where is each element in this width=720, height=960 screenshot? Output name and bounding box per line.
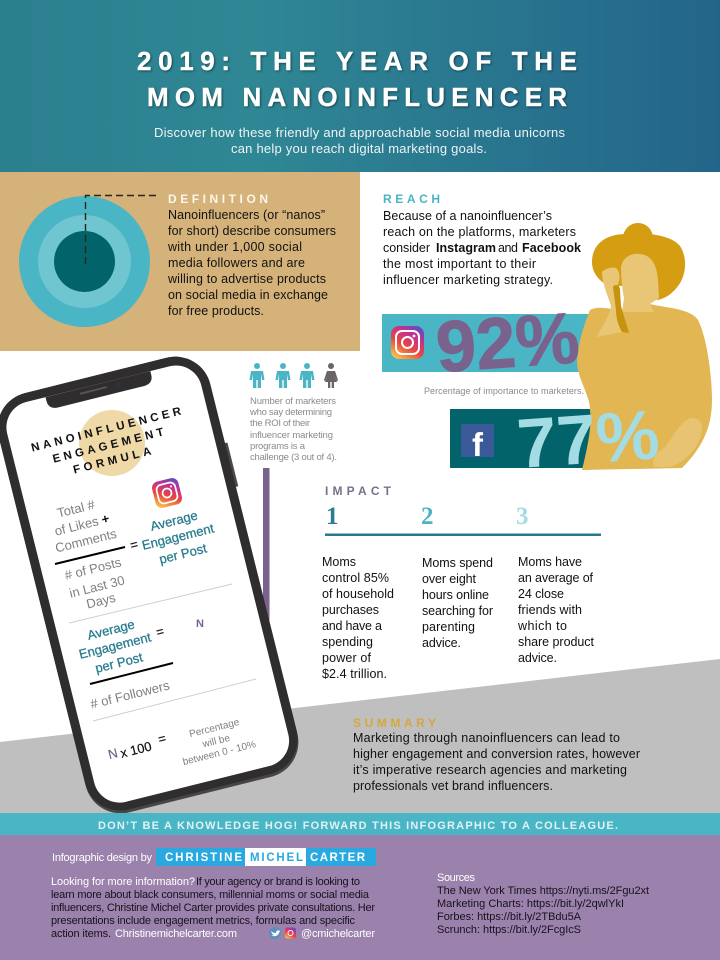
impact column 2: parenting — [422, 620, 475, 634]
title: 2019: THE YEAR OF THE — [137, 46, 577, 76]
stat: 92%: 92% — [434, 298, 582, 388]
illustration: woman in hat — [577, 223, 712, 470]
contact paragraph: If your agency or brand is looking to — [196, 876, 360, 888]
icon: facebook logo — [461, 424, 494, 463]
formula 1 denominator: in Last 30 — [68, 573, 126, 601]
formula 2 denominator: # of Followers — [89, 677, 171, 712]
designer name badge — [156, 848, 376, 866]
social handle: @cmichelcarter — [301, 928, 375, 940]
summary body: Marketing through nanoinfluencers can lead to — [353, 731, 620, 745]
contact paragraph: presentations include engagement metrics, formulas and specific — [51, 915, 356, 927]
pictogram caption: challenge (3 out of 4). — [250, 452, 337, 463]
reach text: reach on the platforms, marketers — [383, 225, 576, 239]
formula 1 denominator: # of Posts — [63, 554, 123, 583]
impact column 3: friends with — [518, 603, 582, 617]
formula 3 result: Percentage — [188, 717, 241, 740]
definition text: on social media in exchange — [168, 288, 328, 302]
formula 1 result: per Post — [158, 540, 209, 567]
formula 1 result: Average — [149, 508, 199, 534]
formula 3 result: will be — [201, 733, 232, 751]
definition text: Nanoinfluencers (or “nanos” — [168, 208, 325, 222]
icon: instagram logo — [391, 326, 424, 359]
icon: facebook logo: f — [472, 426, 484, 463]
formula title: NANOINFLUENCER — [30, 405, 183, 455]
definition text: for short) describe consumers — [168, 224, 336, 238]
impact column 3: share product — [518, 635, 595, 649]
call to action banner: DON’T BE A KNOWLEDGE HOG! FORWARD THIS INFOGRAPHIC TO A COLLEAGUE. — [98, 820, 618, 832]
number 1: 1 — [326, 503, 338, 530]
impact column 3: an average of — [518, 571, 594, 585]
reach text: consider — [383, 241, 430, 255]
designer name badge: CARTER — [310, 852, 366, 864]
formula 1 denominator — [63, 554, 126, 611]
equals sign: = — [154, 623, 165, 640]
contact paragraph — [51, 876, 375, 940]
people pictogram: 3 out of 4 — [250, 363, 338, 388]
pictogram caption: programs is a — [250, 441, 306, 452]
panel: summary background — [0, 659, 720, 813]
stat: 77%: 77% — [515, 395, 662, 483]
phone with engagement formula — [0, 348, 308, 821]
formula 1 numerator: Comments — [54, 526, 119, 556]
sources: Scrunch: https://bit.ly/2FcgIcS — [437, 924, 581, 936]
formula 2 numerator: Average — [86, 617, 136, 643]
footer panel — [0, 835, 720, 960]
summary body — [353, 731, 640, 793]
subtitle — [154, 125, 566, 156]
contact paragraph: action items. — [51, 928, 111, 940]
definition text: for free products. — [168, 304, 264, 318]
impact column 3: advice. — [518, 651, 557, 665]
title — [137, 46, 577, 112]
reach text — [383, 209, 581, 287]
design credit: Infographic design by — [52, 852, 152, 864]
panel: reach — [382, 192, 600, 468]
reach text: the most important to their — [383, 257, 536, 271]
definition text: with under 1,000 social — [167, 240, 302, 254]
title: MOM NANOINFLUENCER — [147, 82, 567, 112]
phone body — [0, 348, 308, 821]
definition text — [167, 208, 336, 318]
pictogram caption: the ROI of their — [250, 418, 310, 429]
formula title — [30, 405, 183, 477]
formula 2 numerator: Engagement — [77, 629, 153, 662]
stat caption: Percentage of importance to marketers. — [424, 386, 584, 396]
call to action banner — [0, 813, 720, 835]
number 2: 2 — [421, 503, 434, 530]
impact column 2 — [422, 556, 493, 650]
subtitle: Discover how these friendly and approachable social media unicorns — [154, 125, 566, 140]
header banner — [0, 0, 720, 172]
formula 3: N — [107, 745, 119, 762]
reach text: and — [498, 241, 518, 255]
panel: impact — [322, 484, 601, 681]
impact column 1: power of — [322, 651, 372, 665]
formula 3 result: between 0 - 10% — [182, 739, 257, 768]
vertical purple bar — [263, 468, 270, 620]
impact column 1 — [322, 555, 394, 681]
pictogram caption: Number of marketers — [250, 396, 336, 407]
impact column 3 — [517, 555, 595, 665]
reach text: Facebook — [522, 241, 581, 255]
formula title badge — [79, 410, 145, 476]
contact paragraph: learn more about black consumers, millennial moms or social media — [51, 889, 370, 901]
summary text block — [353, 716, 640, 793]
reach text: Because of a nanoinfluencer’s — [383, 209, 552, 223]
impact column 3: Moms have — [518, 555, 582, 569]
impact column 1: purchases — [322, 603, 379, 617]
designer name badge: CHRISTINE — [165, 852, 242, 864]
formula title: ENGAGEMENT — [52, 426, 165, 466]
subtitle: can help you reach digital marketing goals. — [231, 141, 487, 156]
contact paragraph: influencers, Christine Michel Carter provides private consultations. Her — [51, 902, 375, 914]
formula 1 denominator: Days — [85, 590, 118, 611]
number 3: 3 — [516, 503, 528, 530]
summary body: professionals vet brand influencers. — [353, 779, 553, 793]
impact column 3: which to — [517, 619, 567, 633]
impact column 1: spending — [322, 635, 373, 649]
pictogram caption — [249, 396, 337, 463]
impact heading: IMPACT — [325, 484, 392, 498]
pictogram caption: who say determining — [249, 407, 332, 418]
impact column 1: of household — [322, 587, 394, 601]
facebook stat bar — [450, 409, 600, 468]
formula 1 numerator — [53, 497, 119, 556]
impact column 1: control 85% — [322, 571, 389, 585]
sources — [437, 872, 649, 936]
icon: concentric circles — [19, 196, 160, 327]
instagram stat bar — [382, 314, 597, 372]
summary heading: SUMMARY — [353, 716, 436, 730]
contact paragraph: Looking for more information? — [51, 876, 195, 888]
formula 3 — [107, 730, 167, 762]
impact column 1: $2.4 trillion. — [322, 667, 387, 681]
definition text: willing to advertise products — [167, 272, 326, 286]
summary body: it’s imperative research agencies and marketing — [353, 763, 627, 777]
formula 1 numerator: Total # — [56, 497, 97, 521]
formula title: FORMULA — [72, 446, 153, 477]
summary body: higher engagement and conversion rates, however — [353, 747, 640, 761]
impact column 1: and have a — [322, 619, 382, 633]
formula 3 result — [182, 717, 257, 768]
definition heading: DEFINITION — [168, 192, 268, 206]
designer name badge: MICHEL — [250, 852, 303, 864]
impact column 2: searching for — [422, 604, 493, 618]
definition text: media followers and are — [168, 256, 305, 270]
formula 3: x 100 — [119, 739, 153, 761]
impact column 3: 24 close — [518, 587, 564, 601]
icon: instagram logo small — [151, 477, 183, 509]
pictogram caption: influencer marketing — [250, 430, 333, 441]
reach text: influencer marketing strategy. — [383, 273, 553, 287]
icon: twitter — [269, 927, 281, 939]
formula 2 numerator — [77, 617, 153, 676]
reach heading: REACH — [383, 192, 440, 206]
formula 1 numerator: of Likes + — [53, 510, 111, 539]
formula 2 numerator: per Post — [94, 649, 145, 676]
impact column 2: over eight — [422, 572, 477, 586]
impact column 2: advice. — [422, 636, 461, 650]
sources: Sources — [437, 872, 476, 884]
formula 1 result: Engagement — [140, 520, 216, 553]
panel: definition — [0, 172, 360, 351]
sources: Marketing Charts: https://bit.ly/2qwlYkI — [437, 898, 624, 910]
variable N: N — [196, 618, 204, 630]
sources: Forbes: https://bit.ly/2TBdu5A — [437, 911, 582, 923]
formula 3: = — [156, 730, 167, 747]
equals sign: = — [128, 536, 139, 553]
icon: instagram small — [285, 928, 296, 938]
reach text: Instagram — [436, 241, 496, 255]
impact column 1: Moms — [322, 555, 356, 569]
formula 1 result — [140, 508, 216, 567]
impact column 2: hours online — [422, 588, 489, 602]
impact column 2: Moms spend — [422, 556, 493, 570]
contact paragraph: Christinemichelcarter.com — [115, 928, 237, 940]
sources: The New York Times https://nyti.ms/2Fgu2xt — [437, 885, 649, 897]
